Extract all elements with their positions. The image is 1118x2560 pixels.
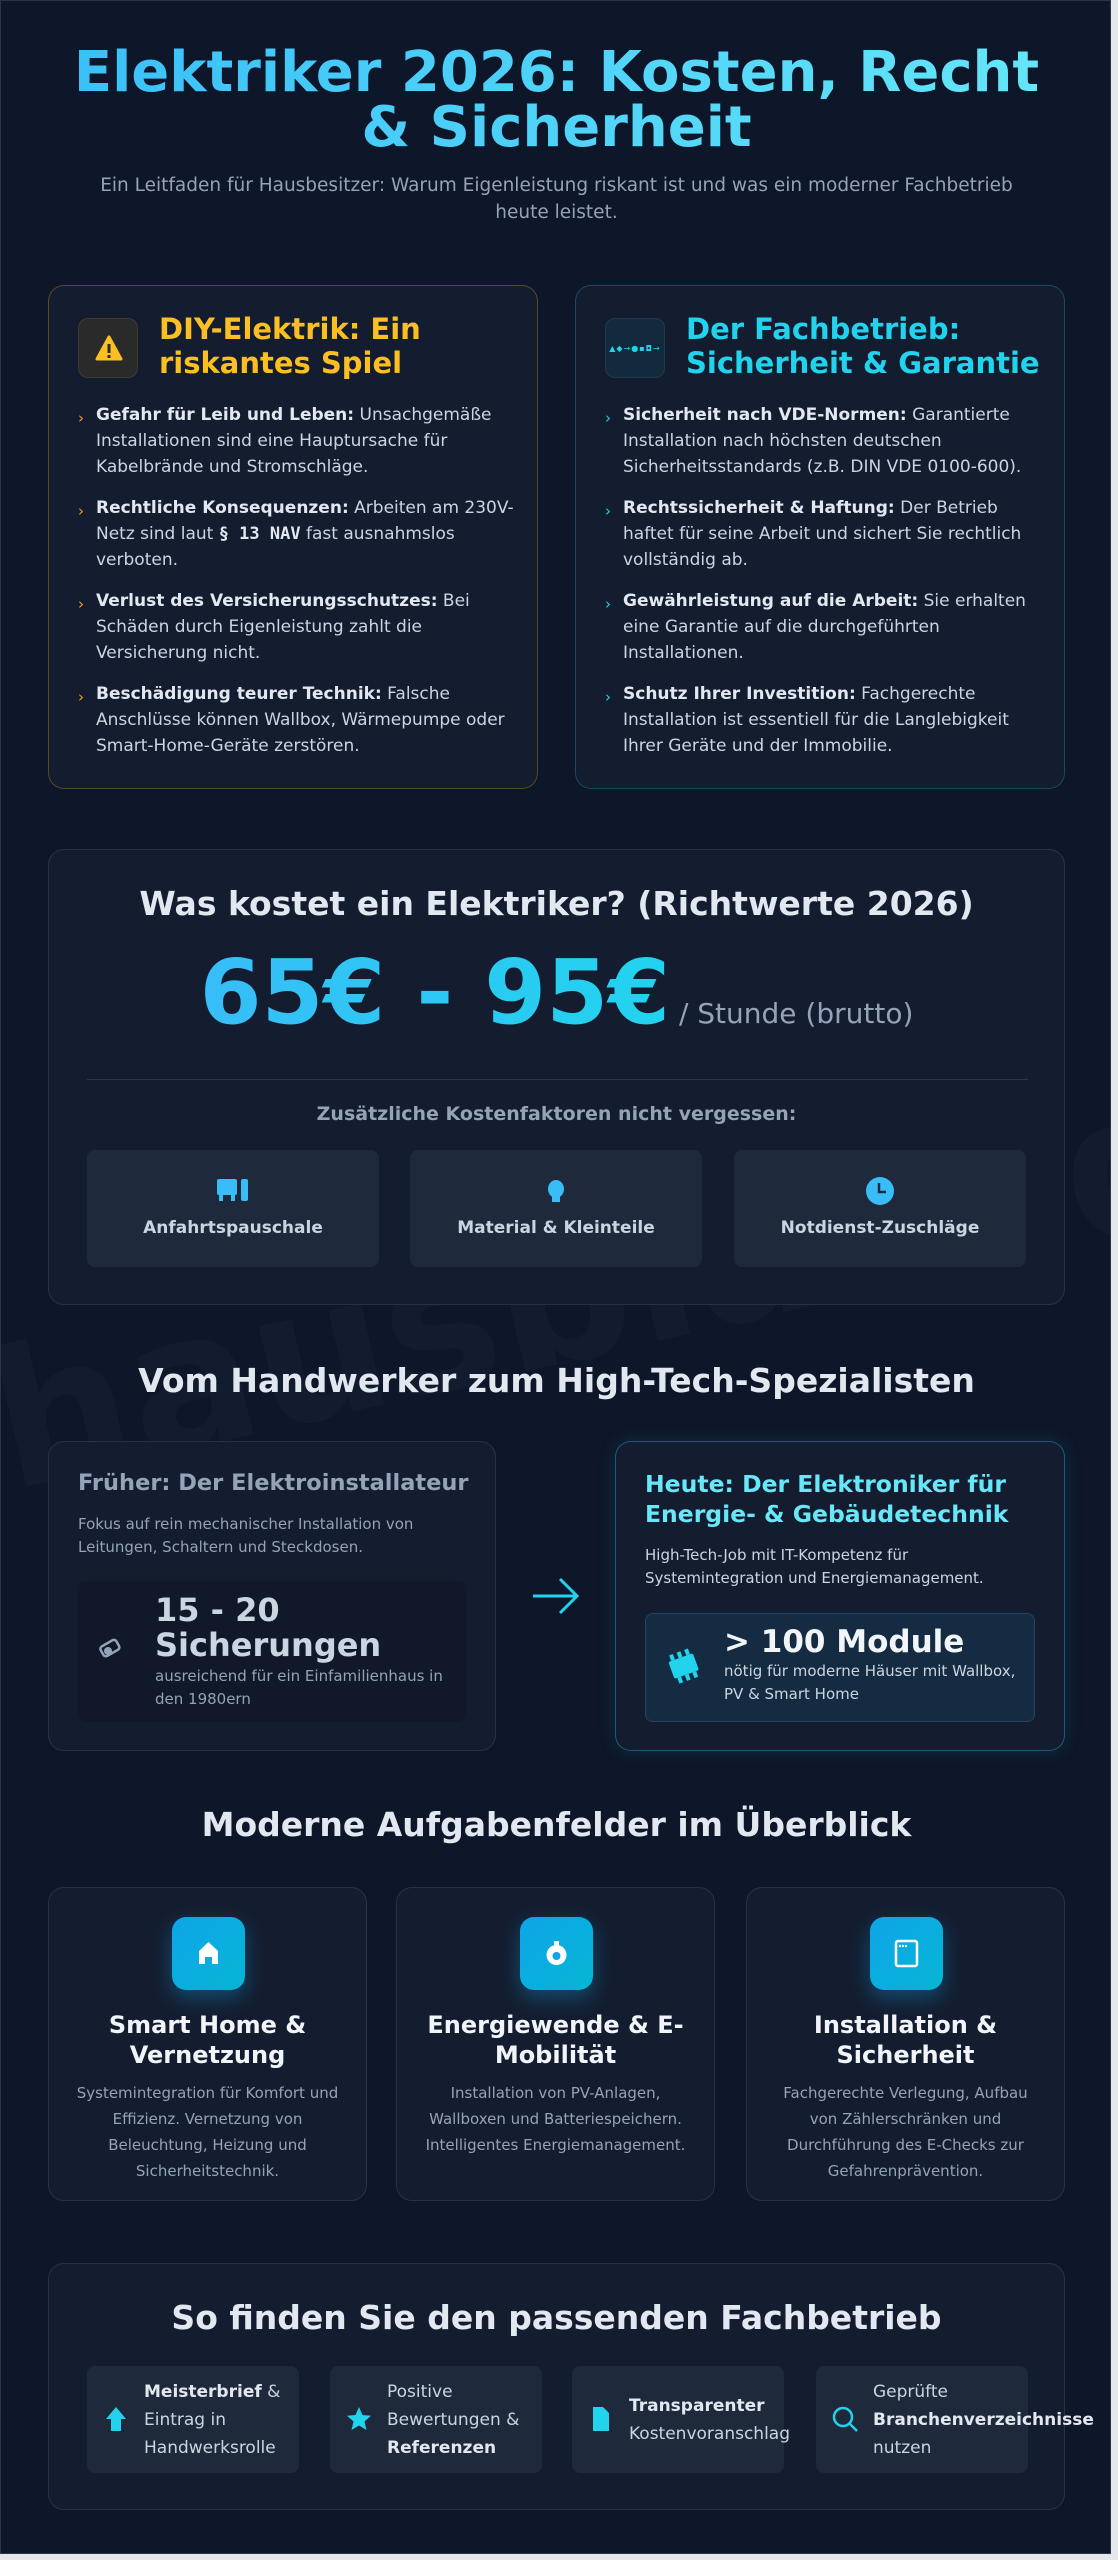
task card: energy: Mobilität — [495, 2041, 616, 2069]
task card: energy: Installation von PV-Anlagen, Wallboxen und Batteriespeichern. Intelligentes Energiemanagement. — [426, 2084, 685, 2154]
tip: Branchenverzeichnisse: Geprüfte — [873, 2382, 948, 2402]
cost factor: Notdienst — [734, 1150, 1026, 1267]
stat: Module: nötig für moderne Häuser mit Wallbox, PV & Smart Home — [724, 1662, 1015, 1703]
heading: DIY: riskantes Spiel — [159, 346, 402, 380]
panel: costs — [48, 849, 1065, 1305]
icon: shield — [605, 318, 665, 378]
icon: panel — [870, 1917, 943, 1990]
arrow — [533, 1578, 579, 1614]
tip: Kostenvoranschlag — [572, 2366, 784, 2473]
subheading: extra costs: Zusätzliche Kostenfaktoren nicht vergessen: — [317, 1103, 796, 1125]
list: benefits: Sicherheit nach VDE-Normen: Garantierte Installation nach höchsten deutschen Sicherheitsstandards (z.B. DIN VDE 0100-600). — [623, 405, 1021, 477]
task card: installation: Sicherheit — [836, 2041, 974, 2069]
icon: house — [172, 1917, 245, 1990]
tip: Kostenvoranschlag: Kostenvoranschlag — [629, 2424, 790, 2444]
tip: Meisterbrief: Meisterbrief & — [144, 2382, 280, 2402]
text: früher: Fokus auf rein mechanischer Installation von Leitungen, Schaltern und Steckdosen. — [78, 1515, 413, 1556]
task card: energy: Energiewende & E- — [427, 2011, 684, 2039]
list: DIY risks: › — [78, 409, 84, 427]
task card: installation — [746, 1887, 1065, 2201]
tip: Meisterbrief: Handwerksrolle — [144, 2438, 276, 2458]
tip: Meisterbrief — [87, 2366, 299, 2473]
list: benefits: Gewährleistung auf die Arbeit: Sie erhalten eine Garantie auf die durchgeführten Installationen. — [623, 591, 1026, 663]
cost factor: Anfahrt — [87, 1150, 379, 1267]
list: benefits: › — [605, 502, 611, 520]
list: DIY risks — [78, 405, 514, 756]
list: benefits: › — [605, 688, 611, 706]
icon: chip — [668, 1648, 698, 1684]
panel: Fachbetrieb — [575, 285, 1065, 789]
list: DIY risks: Rechtliche Konsequenzen: Arbeiten am 230V-Netz sind laut § 13 NAV fast ausnahmslos verboten. — [96, 498, 514, 570]
list: DIY risks: › — [78, 502, 84, 520]
stat: Module: > 100 Module — [724, 1624, 964, 1660]
tip: Bewertungen: Bewertungen & — [387, 2410, 519, 2430]
tip: Branchenverzeichnisse: nutzen — [873, 2438, 931, 2458]
task card: smart home: Smart Home & — [109, 2011, 306, 2039]
stat: Module — [645, 1613, 1035, 1722]
tip: Branchenverzeichnisse — [816, 2366, 1028, 2473]
task card: energy — [396, 1887, 715, 2201]
list: DIY risks: › — [78, 595, 84, 613]
list: benefits: Rechtssicherheit & Haftung: Der Betrieb haftet für seine Arbeit und sichert Sie rechtlich vollständig ab. — [623, 498, 1021, 570]
heading: evolution: Vom Handwerker zum High-Tech-Spezialisten — [138, 1361, 975, 1400]
task card: smart home: Vernetzung — [130, 2041, 285, 2069]
heading: heute — [645, 1470, 1009, 1528]
stat: Sicherungen: Sicherungen — [155, 1626, 381, 1664]
list: DIY risks: Gefahr für Leib und Leben: Unsachgemäße Installationen sind eine Hauptursache für Kabelbrände und Stromschläge. — [96, 405, 492, 477]
heading: heute: Energie- & Gebäudetechnik — [645, 1500, 1008, 1528]
task card: smart home: Systemintegration für Komfort und Effizienz. Vernetzung von Beleuchtung, Heizung und Sicherheitstechnik. — [77, 2084, 338, 2180]
cost factor: Material: Material & Kleinteile — [457, 1218, 655, 1238]
title: Elektriker 2026: Kosten, Recht — [74, 40, 1039, 105]
list: benefits: Schutz Ihrer Investition: Fachgerechte Installation ist essentiell für die Langlebigkeit Ihrer Geräte und der Immobilie. — [623, 684, 1009, 756]
tip: Kostenvoranschlag: Transparenter — [629, 2396, 765, 2416]
tip: Bewertungen: Referenzen — [387, 2438, 496, 2458]
heading: heute: Heute: Der Elektroniker für — [645, 1470, 1006, 1498]
panel: DIY risks — [48, 285, 538, 789]
task card: installation: Fachgerechte Verlegung, Aufbau von Zählerschränken und Durchführung des E-Checks zur Gefahrenprävention. — [783, 2084, 1028, 2180]
task card: smart home — [48, 1887, 367, 2201]
cost factor: Material — [410, 1150, 702, 1267]
heading: DIY: DIY-Elektrik: Ein — [159, 312, 421, 346]
cost factor: Anfahrt: Anfahrtspauschale — [143, 1218, 323, 1238]
heading: tasks: Moderne Aufgabenfelder im Überblick — [202, 1805, 911, 1844]
list: benefits: › — [605, 409, 611, 427]
panel: früher — [48, 1441, 496, 1751]
title: & Sicherheit — [361, 95, 752, 160]
list: DIY risks: Verlust des Versicherungsschutzes: Bei Schäden durch Eigenleistung zahlt die Versicherung nicht. — [96, 591, 470, 663]
list: benefits — [605, 405, 1026, 756]
text: heute: High-Tech-Job mit IT-Kompetenz für Systemintegration und Energiemanagement. — [645, 1546, 984, 1587]
cost factor: Notdienst: Notdienst-Zuschläge — [781, 1218, 979, 1238]
title — [1, 45, 1112, 155]
price: 65€ - 95€ / Stunde (brutto) — [200, 940, 913, 1044]
icon: fuse — [99, 1638, 121, 1658]
list: benefits: › — [605, 595, 611, 613]
tip: Bewertungen: Positive — [387, 2382, 453, 2402]
heading: früher: Früher: Der Elektroinstallateur — [78, 1470, 469, 1496]
tip: Meisterbrief: Eintrag in — [144, 2410, 226, 2430]
heading: find: So finden Sie den passenden Fachbetrieb — [171, 2298, 942, 2337]
tip: Bewertungen — [330, 2366, 542, 2473]
tip: Branchenverzeichnisse: Branchenverzeichnisse — [873, 2410, 1094, 2430]
list: DIY risks: › — [78, 688, 84, 706]
heading: DIY — [159, 312, 421, 380]
icon: warning — [78, 318, 138, 378]
stat: Sicherungen — [78, 1581, 466, 1722]
list: DIY risks: Beschädigung teurer Technik: Falsche Anschlüsse können Wallbox, Wärmepumpe oder Smart-Home-Geräte zerstören. — [96, 684, 505, 756]
icon: plug — [520, 1917, 593, 1990]
heading: Fachbetrieb — [686, 312, 1040, 380]
task card: installation: Installation & — [814, 2011, 997, 2039]
panel: heute — [615, 1441, 1065, 1751]
panel: find a business — [48, 2263, 1065, 2510]
heading: Fachbetrieb: Der Fachbetrieb: — [686, 312, 960, 346]
icon: shield: ▲◆→●▪◘→ — [609, 344, 661, 353]
stat: Sicherungen: ausreichend für ein Einfamilienhaus in den 1980ern — [155, 1667, 443, 1708]
heading: Fachbetrieb: Sicherheit & Garantie — [686, 346, 1040, 380]
subtitle: Ein Leitfaden für Hausbesitzer: Warum Eigenleistung riskant ist und was ein moderner Fachbetrieb heute leistet. — [100, 175, 1013, 223]
stat: Sicherungen: 15 - 20 — [155, 1591, 280, 1629]
heading: costs: Was kostet ein Elektriker? (Richtwerte 2026) — [139, 884, 974, 923]
